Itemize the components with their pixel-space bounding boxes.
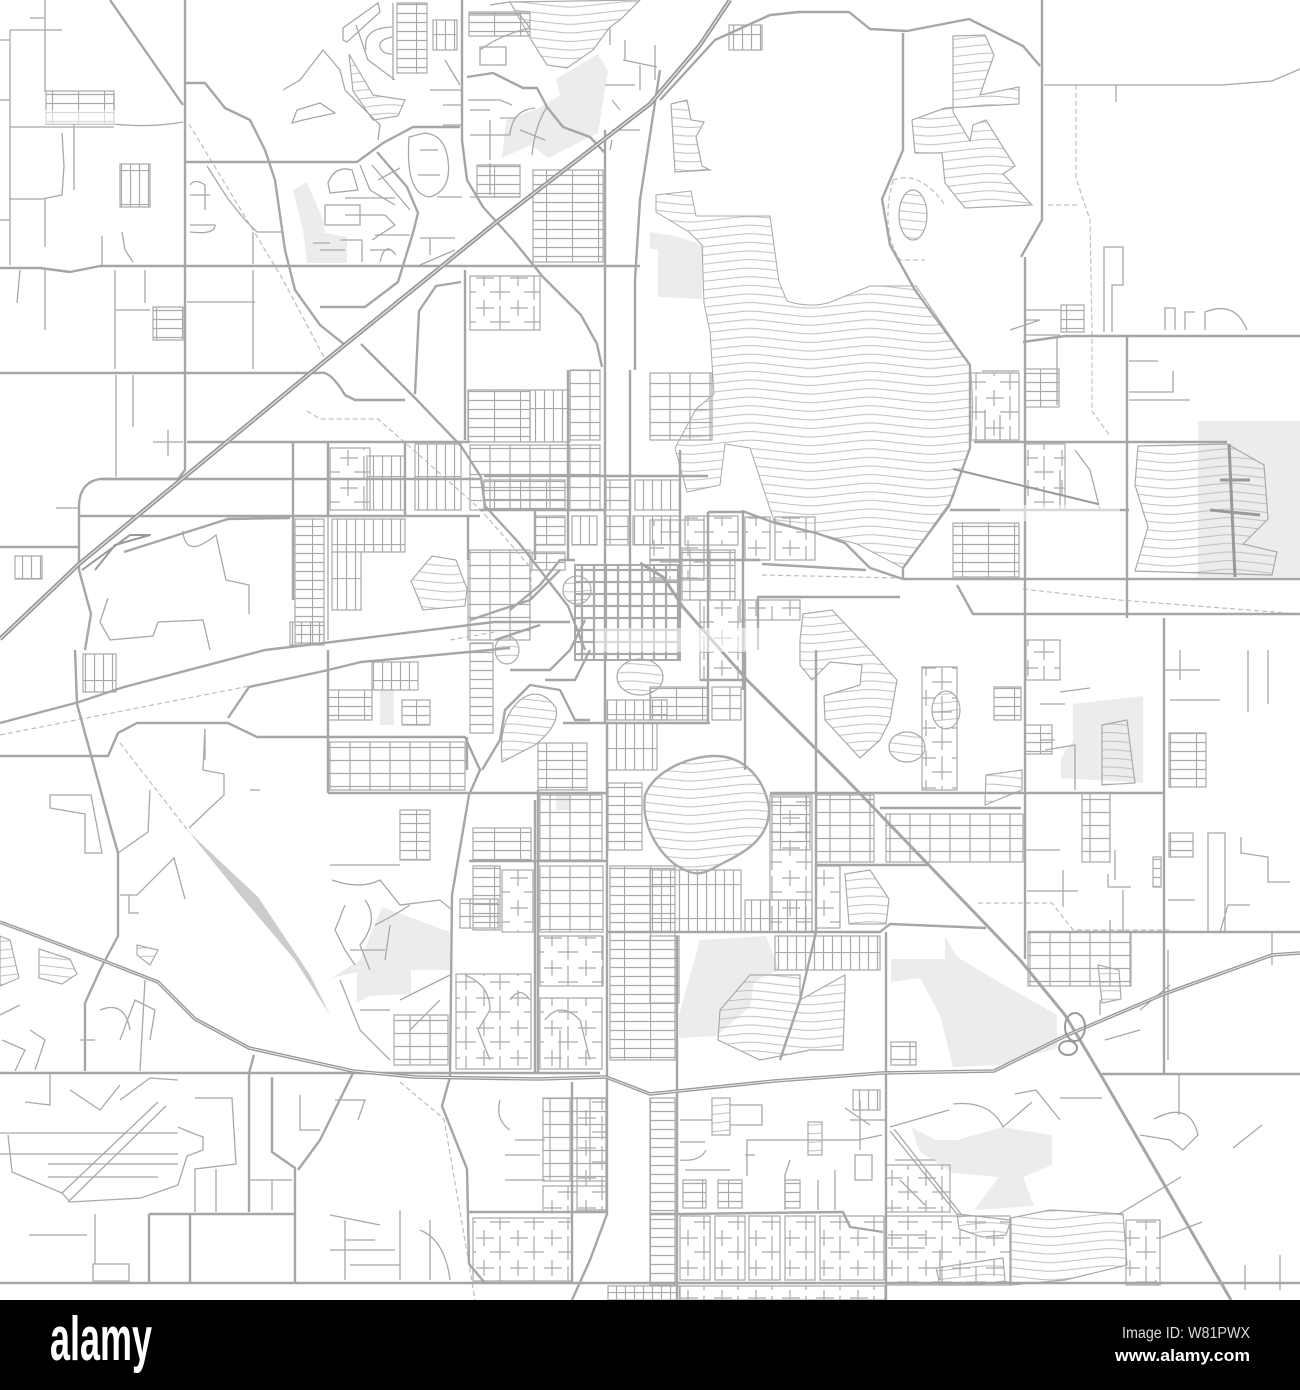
lake: small west of downtown	[495, 636, 519, 664]
west road 1	[0, 622, 570, 723]
south freeway median	[0, 922, 1300, 1094]
north residential cluster	[468, 2, 657, 160]
lake: small by 1100	[712, 1098, 730, 1135]
website: www.alamy.com	[1114, 1346, 1250, 1365]
suburban curving streets south-west of centre	[330, 865, 590, 1068]
footer bar	[0, 1300, 1300, 1390]
west road 2	[228, 648, 510, 718]
downtown arcs	[470, 560, 590, 770]
vertical street blocks	[15, 20, 880, 1300]
rural west middle streets	[0, 445, 328, 1071]
east rural streets	[982, 69, 1300, 510]
interchange east	[1065, 1013, 1085, 1041]
airport	[0, 1073, 236, 1281]
lake: north-west residential	[349, 54, 405, 120]
north-east freeway	[0, 0, 730, 639]
road near freeway junction	[320, 152, 461, 400]
lake: in east park	[1102, 720, 1135, 785]
north-east freeway median	[0, 0, 730, 639]
west curving road	[186, 83, 345, 345]
western interchange	[82, 535, 150, 570]
east-west arterials north	[0, 127, 640, 600]
freeways	[0, 0, 1300, 1094]
west vertical arterials	[75, 0, 185, 1071]
lake: large northern lake	[656, 191, 972, 568]
east-west arterials south	[0, 680, 1300, 1283]
square street blocks	[328, 370, 1131, 1181]
south-west arterials	[149, 1055, 353, 1283]
lake: round central lake	[644, 756, 769, 873]
park areas	[189, 54, 1300, 1210]
lake: downtown round	[563, 576, 591, 604]
lake: top centre	[510, 0, 640, 68]
lake: west edge two	[39, 949, 77, 984]
lake: south bottom	[936, 1258, 1005, 1285]
east-west arterials east	[650, 336, 1300, 1232]
interchange east second loop	[1059, 1041, 1077, 1055]
lake: north strip	[671, 100, 710, 172]
curved streets south of freeway	[680, 1100, 885, 1210]
lake: south-east large	[1011, 1210, 1127, 1285]
east north-south arterials	[677, 0, 1164, 1300]
north-west to freeway road	[110, 0, 183, 105]
lake: south-east small	[957, 1214, 1011, 1237]
diagonal road from north	[462, 0, 602, 367]
lake: by highway	[137, 945, 158, 965]
north loop road	[660, 12, 1040, 100]
south freeway	[0, 922, 1300, 1094]
lake: west lake	[411, 556, 467, 610]
south-central arterials	[328, 650, 677, 1283]
downtown small blocks	[575, 565, 680, 660]
lake: downtown south round	[617, 659, 663, 695]
south-west streets	[249, 1095, 545, 1280]
lake: narrow south	[808, 1122, 822, 1155]
lake: small oval near north-east	[899, 190, 927, 240]
sparse street blocks	[330, 276, 1160, 1300]
south-central loop streets	[890, 650, 1290, 1290]
east park streets	[1025, 650, 1220, 1060]
watermark fade	[20, 110, 1120, 652]
road looping north	[467, 73, 605, 153]
lake: near interchange	[1098, 965, 1121, 1003]
image id: Image ID: W81PWX	[1122, 1325, 1250, 1342]
lake: south-middle	[845, 870, 889, 924]
logo: alamy: alamy	[50, 1305, 152, 1374]
lake: east of downtown	[800, 610, 897, 758]
lake: oval south-east	[889, 732, 925, 762]
lake causeway	[1210, 444, 1260, 577]
diagonal main road	[640, 563, 1231, 1300]
diagonal through downtown north-west	[361, 344, 708, 650]
east rail	[953, 469, 1098, 504]
lake: west edge one	[0, 936, 19, 986]
lake: south central cluster	[718, 975, 845, 1060]
lake: band by road	[985, 770, 1022, 805]
lake: teardrop	[501, 694, 557, 762]
west suburban loops	[50, 166, 282, 913]
central verticals	[535, 70, 745, 1300]
lake: north-east branching lake	[912, 35, 1032, 208]
west road 3	[0, 723, 480, 795]
lake: oval east	[932, 691, 960, 729]
north suburbs curved streets	[283, 3, 520, 265]
north-west streets	[0, 0, 255, 508]
lake: east lake	[1135, 444, 1277, 575]
road with rail south of freeway	[888, 1129, 961, 1280]
